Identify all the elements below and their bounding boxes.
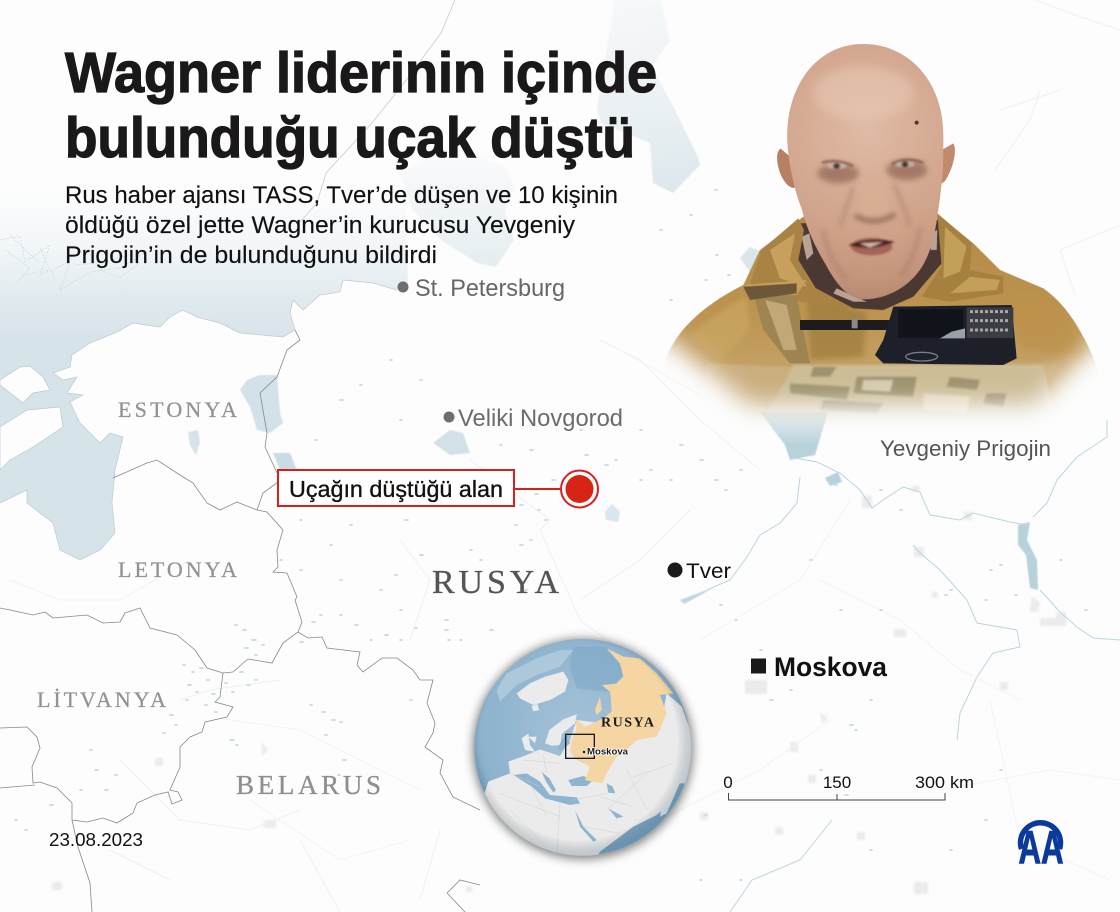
Baltic sea and Gulf of Finland bbox=[0, 190, 408, 560]
subtitle bbox=[65, 182, 618, 269]
small lakes scatter bbox=[15, 190, 1087, 880]
russia bbox=[570, 648, 673, 783]
callout: crash area bbox=[278, 470, 598, 508]
subtitle: Prigojin’in de bulunduğunu bildirdi bbox=[65, 242, 437, 269]
chest straps bbox=[753, 293, 810, 363]
radio body bbox=[875, 305, 1017, 365]
locator globe bbox=[473, 639, 700, 870]
portrait photo: Yevgeniy Prigojin bbox=[666, 44, 1096, 422]
rivers bbox=[707, 420, 1120, 912]
seas bbox=[513, 773, 580, 805]
collar right bbox=[922, 213, 1003, 302]
scale bar: 300 km bbox=[915, 773, 974, 792]
city: Moskova: Moskova bbox=[774, 652, 888, 682]
title: Wagner liderinin içinde bbox=[65, 41, 657, 105]
callout: crash area: Uçağın düştüğü alan bbox=[289, 476, 503, 502]
coast line bbox=[0, 280, 397, 560]
greenland bbox=[517, 672, 568, 705]
forehead highlight bbox=[813, 67, 913, 120]
logo: AA bbox=[1018, 821, 1064, 873]
Finland border bbox=[300, 0, 455, 222]
date: 23.08.2023 bbox=[49, 830, 143, 850]
eurasia and africa land bbox=[484, 694, 691, 856]
city: St. Petersburg: St. Petersburg bbox=[415, 275, 565, 302]
title: bulunduğu uçak düştü bbox=[65, 106, 635, 170]
british isles bbox=[522, 733, 537, 752]
ears bbox=[777, 149, 797, 188]
nose and face creases bbox=[822, 184, 922, 278]
scale bar: 150 bbox=[823, 773, 851, 792]
mouth bbox=[848, 238, 895, 255]
lakes bbox=[188, 0, 1038, 604]
photo caption: Yevgeniy Prigojin bbox=[880, 436, 1051, 461]
Estonian islands bbox=[0, 366, 63, 470]
city: Tver bbox=[668, 560, 731, 583]
locator globe: RUSYA bbox=[601, 716, 655, 730]
logo: AA: AA bbox=[1018, 821, 1064, 873]
city: Veliki Novgorod: Veliki Novgorod bbox=[458, 405, 623, 432]
city patches bbox=[52, 486, 1066, 894]
title bbox=[65, 41, 657, 170]
subtitle: Rus haber ajansı TASS, Tver’de düşen ve 10 kişinin bbox=[65, 182, 618, 209]
scandinavia bbox=[545, 714, 577, 746]
locator globe: Moskova bbox=[587, 746, 629, 758]
scarf bbox=[797, 220, 942, 310]
country lines bbox=[500, 755, 673, 857]
country label: Rusya: RUSYA bbox=[432, 564, 559, 601]
deep ocean band bbox=[570, 647, 625, 692]
scale bar bbox=[723, 773, 974, 800]
jacket bbox=[666, 214, 1096, 408]
scale bar: 0 bbox=[723, 773, 733, 792]
shallow arctic bbox=[497, 650, 573, 702]
city: Tver: Tver bbox=[686, 560, 731, 583]
jacket folds bbox=[696, 300, 1080, 378]
country borders bbox=[0, 330, 480, 912]
eye sockets bbox=[818, 160, 927, 183]
country label: Litvanya: LİTVANYA bbox=[37, 687, 166, 712]
collar left bbox=[750, 218, 853, 308]
country label: Belarus: BELARUS bbox=[236, 770, 381, 800]
radio antenna bbox=[800, 320, 890, 330]
vest bbox=[706, 364, 1050, 414]
country label: Estonya: ESTONYA bbox=[118, 397, 237, 422]
Finnish skerries bbox=[0, 235, 150, 290]
mole bbox=[915, 121, 919, 125]
subtitle: öldüğü özel jette Wagner’in kurucusu Yevgeniy bbox=[65, 212, 576, 239]
locator box bbox=[566, 734, 594, 758]
country label: Letonya: LETONYA bbox=[118, 557, 237, 582]
head bbox=[787, 44, 943, 299]
